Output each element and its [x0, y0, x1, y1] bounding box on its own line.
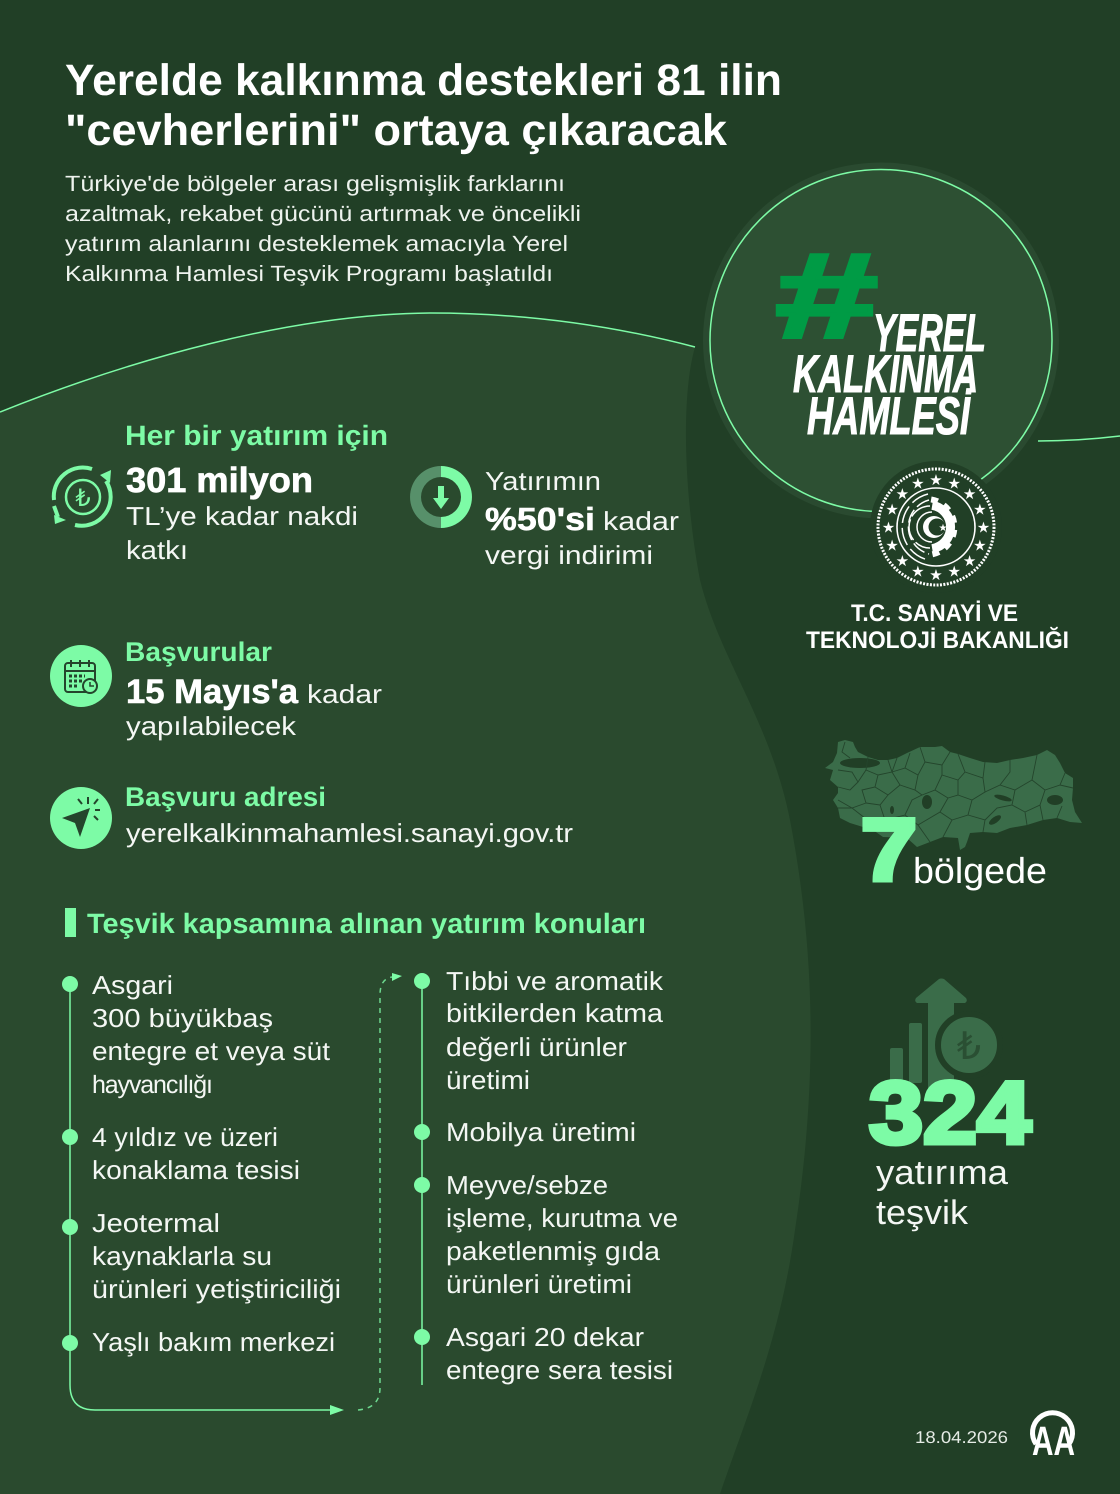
text: up to 50% tax reduction: kadar [603, 506, 679, 536]
date text: yapılabilecek [126, 711, 297, 741]
emblem: ministry seal: ★ [911, 475, 925, 493]
item: food processing: Meyve/sebze [446, 1170, 608, 1200]
intro text [65, 171, 581, 286]
stat: 324 investments: yatırıma [876, 1154, 1008, 1192]
emblem: ministry seal: ★ [885, 500, 899, 518]
item: livestock: Asgari [92, 970, 173, 1000]
emblem: ministry seal: ★ [911, 562, 925, 580]
item: accommodation: 4 yıldız ve üzeri [92, 1122, 278, 1152]
logo wordmark: HAMLESİ [807, 387, 972, 446]
emblem: ministry seal: ★ [885, 537, 899, 555]
item: food processing: paketlenmiş gıda [446, 1236, 661, 1266]
logo wordmark: YEREL [873, 304, 986, 363]
date: 18.04.2026 [915, 1428, 1008, 1447]
item: food processing: ürünleri üretimi [446, 1269, 632, 1299]
emblem: ministry seal: ★ [896, 485, 909, 503]
heading: Başvurular [125, 637, 272, 667]
map: Turkey [825, 740, 1082, 850]
right accent line [1038, 436, 1120, 441]
icon: growth chart with lira coin: ₺ [957, 1024, 981, 1068]
item: food processing: işleme, kurutma ve [446, 1203, 678, 1233]
emblem: ministry seal: ★ [963, 485, 976, 503]
description: cash contribution: TL’ye kadar nakdi [126, 501, 358, 531]
list: right column [414, 966, 678, 1385]
item: food processing [414, 1170, 678, 1299]
icon: lira coin cycle [54, 467, 111, 526]
ministry name: T.C. SANAYİ VE [851, 600, 1018, 627]
logo wordmark: KALKINMA [793, 345, 978, 404]
intro text: Türkiye'de bölgeler arası gelişmişlik farklarını [65, 171, 565, 196]
item: greenhouse: Asgari 20 dekar [446, 1322, 644, 1352]
emblem: ministry seal: ★ [973, 500, 987, 518]
icon: half donut with down arrow [410, 466, 472, 528]
item: livestock: 300 büyükbaş [92, 1003, 273, 1033]
stat: 324 investments: 324 [869, 1063, 1031, 1162]
emblem: ministry seal: ★ [882, 518, 895, 536]
date text: kadar [307, 679, 382, 709]
item: geothermal aquaculture: Jeotermal [92, 1208, 220, 1238]
item: greenhouse [414, 1322, 673, 1385]
intro text: azaltmak, rekabet gücünü artırmak ve öncelikli [65, 201, 581, 226]
logo: Yerel Kalkınma Hamlesi circle [703, 162, 1059, 518]
icon: lira coin cycle: ₺ [75, 484, 91, 512]
logo: AA: AA [1032, 1418, 1075, 1464]
item: medicinal plants: Tıbbi ve aromatik [446, 966, 664, 996]
list: left column [62, 970, 341, 1357]
emblem: ministry seal: ★ [929, 471, 943, 489]
emblem: ministry seal: ★ [963, 552, 976, 570]
item: geothermal aquaculture: kaynaklarla su [92, 1241, 272, 1271]
item: medicinal plants [414, 966, 664, 1095]
intro text: Kalkınma Hamlesi Teşvik Programı başlatıldı [65, 261, 553, 286]
logo wordmark [793, 304, 986, 446]
section: application deadline [50, 637, 382, 741]
section: application address [50, 782, 573, 849]
item: elderly care: Yaşlı bakım merkezi [92, 1327, 335, 1357]
item: accommodation [62, 1122, 300, 1185]
heading: Her bir yatırım için [125, 420, 388, 451]
date text: 15 Mayıs'a [126, 673, 299, 711]
emblem: ministry seal [870, 461, 1002, 593]
description: cash contribution: katkı [126, 535, 188, 565]
item: greenhouse: entegre sera tesisi [446, 1355, 673, 1385]
hashtag: # [773, 229, 875, 363]
logo: AA [1032, 1413, 1075, 1464]
item: accommodation: konaklama tesisi [92, 1155, 300, 1185]
timeline connector [70, 973, 422, 1415]
item: livestock: entegre et veya süt [92, 1036, 331, 1066]
section heading: investment topics: Teşvik kapsamına alınan yatırım konuları [87, 908, 646, 939]
stat: 324 investments: teşvik [876, 1194, 969, 1232]
text: up to 50% tax reduction [485, 466, 679, 570]
stat: 324 investments [869, 1063, 1031, 1232]
stat: 7 regions: 7 [861, 800, 917, 899]
item: livestock: hayvancılığı [92, 1071, 213, 1099]
item: furniture: Mobilya üretimi [446, 1117, 636, 1147]
title: Yerelde kalkınma destekleri 81 ilin [65, 56, 782, 105]
item: medicinal plants: değerli ürünler [446, 1032, 627, 1062]
item: geothermal aquaculture [62, 1208, 341, 1304]
emblem: ministry seal: ★ [947, 475, 961, 493]
section: tax reduction [410, 466, 679, 570]
emblem: ministry seal: ★ [947, 562, 961, 580]
emblem: ministry seal: ★ [973, 537, 987, 555]
item: geothermal aquaculture: ürünleri yetiştiriciliği [92, 1274, 341, 1304]
ministry name [806, 600, 1069, 654]
item: livestock [62, 970, 331, 1099]
icon: calendar [50, 645, 112, 707]
text: up to 50% tax reduction: %50'si [485, 501, 595, 537]
icon: click cursor [50, 787, 112, 849]
emblem: ministry seal: ★ [896, 552, 909, 570]
section: investment support [54, 420, 388, 565]
ministry name: TEKNOLOJİ BAKANLIĞI [806, 626, 1069, 654]
text: up to 50% tax reduction: Yatırımın [485, 466, 601, 496]
date text [126, 673, 382, 741]
title: "cevherlerini" ortaya çıkaracak [65, 106, 728, 155]
emblem: ministry seal: ★ [939, 523, 948, 534]
stat: 7 regions [861, 800, 1047, 899]
item: medicinal plants: üretimi [446, 1065, 530, 1095]
description: cash contribution [126, 501, 358, 565]
value: 301 million: 301 milyon [126, 461, 313, 500]
heading: Başvuru adresi [125, 782, 326, 812]
title [65, 56, 782, 155]
text: up to 50% tax reduction: vergi indirimi [485, 540, 653, 570]
icon: growth chart with lira coin [890, 978, 1000, 1090]
emblem: ministry seal: ★ [977, 518, 990, 536]
item: medicinal plants: bitkilerden katma [446, 998, 664, 1028]
emblem: ministry seal: ★ [929, 566, 943, 584]
url: yerelkalkinmahamlesi.sanayi.gov.tr [126, 818, 573, 848]
curved accent line [0, 313, 695, 412]
stat: 7 regions: bölgede [913, 850, 1047, 891]
background panel: lighter curved area [0, 313, 811, 1494]
intro text: yatırım alanlarını desteklemek amacıyla Yerel [65, 231, 568, 256]
